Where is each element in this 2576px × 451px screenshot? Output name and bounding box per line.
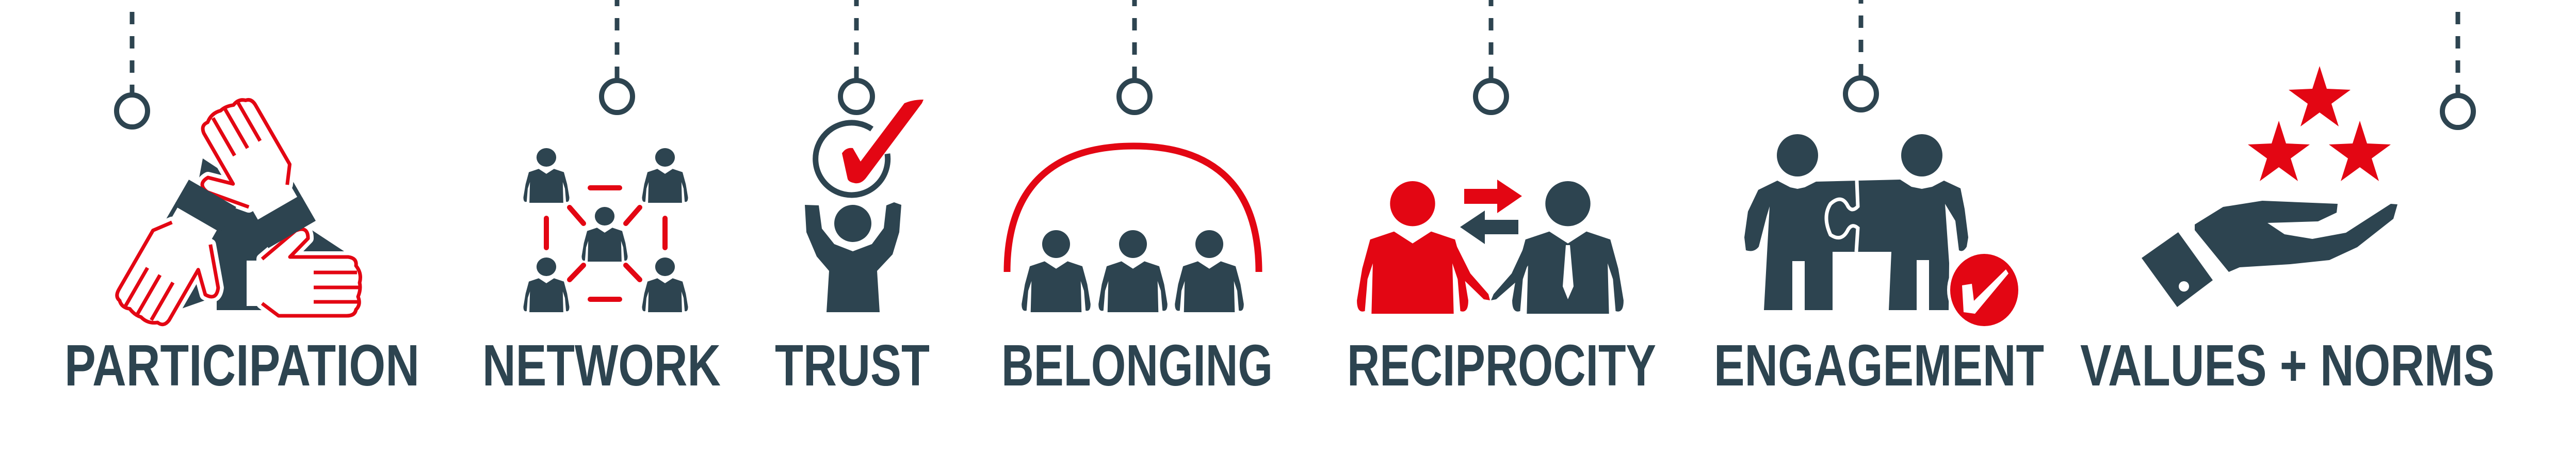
- icon: network: [523, 148, 688, 312]
- label: engagement: ENGAGEMENT: [1714, 333, 2044, 398]
- hanger: belonging: [1119, 0, 1150, 112]
- hanger: values: [2442, 0, 2473, 127]
- label: network: NETWORK: [482, 333, 721, 398]
- hanger: network: [602, 0, 633, 112]
- label: trust: TRUST: [775, 333, 930, 398]
- icon: belonging: [1007, 146, 1259, 312]
- icon: values + norms: [2142, 66, 2397, 307]
- icon: trust: [805, 100, 924, 312]
- icon: engagement: [1744, 134, 2021, 328]
- hanger: reciprocity: [1476, 0, 1506, 112]
- icon: participation hands: [112, 93, 360, 345]
- hanger: engagement: [1845, 0, 1876, 110]
- icon: reciprocity: [1357, 180, 1624, 314]
- label: belonging: BELONGING: [1001, 333, 1273, 398]
- label: reciprocity: RECIPROCITY: [1347, 333, 1656, 398]
- label: participation: PARTICIPATION: [64, 333, 419, 398]
- hanger: trust: [840, 0, 872, 112]
- hanger: participation: [117, 0, 148, 127]
